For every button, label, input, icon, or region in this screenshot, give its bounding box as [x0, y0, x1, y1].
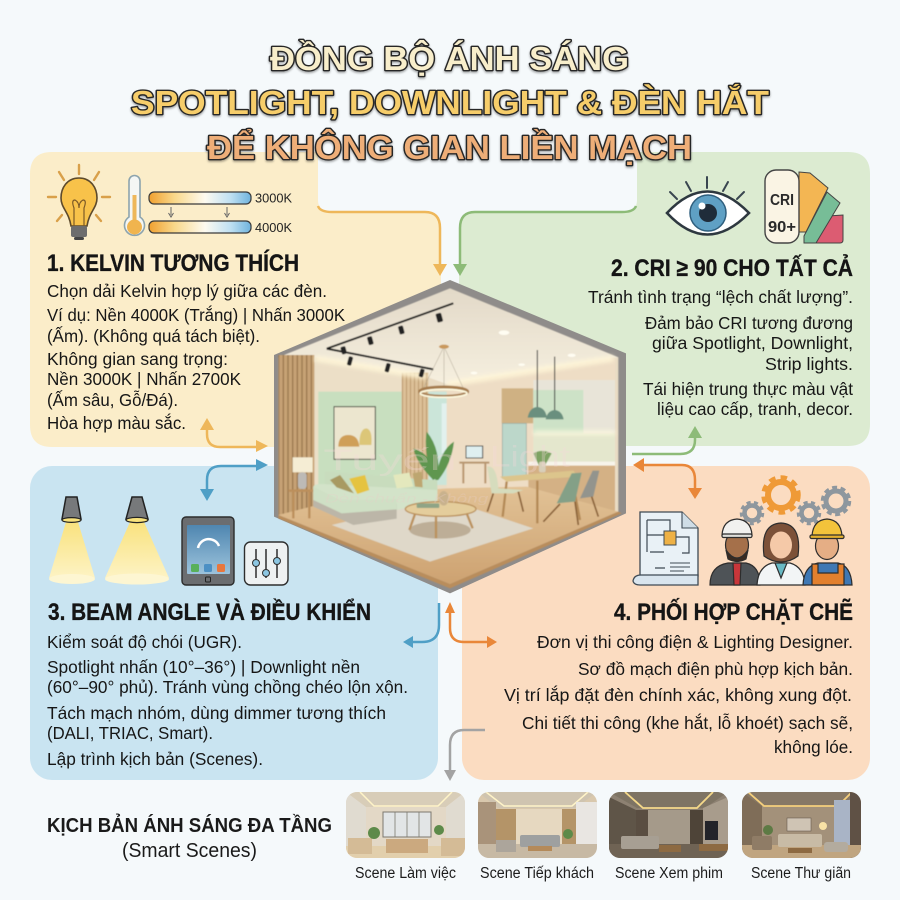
- text block: panel 4 body: Vị trí lắp đặt đèn chính xác, không xung đột.: [504, 685, 852, 705]
- text block: panel 2 body: [588, 287, 853, 419]
- arrow: yellow top: [318, 206, 447, 276]
- arrow: blue double: [200, 459, 268, 501]
- icon: spotlight narrow beam: [49, 497, 95, 584]
- text block: panel 3 body: Kiểm soát độ chói (UGR).: [47, 632, 242, 652]
- text block: panel 2 body: Tránh tình trạng “lệch chất lượng”.: [588, 287, 853, 307]
- icon: light bulb: [48, 165, 110, 240]
- text block: panel 1 body: Không gian sang trọng:: [47, 349, 228, 369]
- text block: panel 1 body: Hòa hợp màu sắc.: [47, 413, 186, 433]
- icon: CRI swatch fan: 90+: [768, 219, 796, 236]
- text block: panel 2 body: Strip lights.: [765, 354, 853, 374]
- text block: panel 3 body: (DALI, TRIAC, Smart).: [47, 723, 213, 743]
- text block: panel 2 body: Đảm bảo CRI tương đương: [645, 313, 853, 333]
- text block: panel 4 body: Chi tiết thi công (khe hắt, lỗ khoét) sạch sẽ,: [522, 713, 853, 733]
- scene: cinema: [609, 792, 728, 858]
- icon: thermometer: [124, 176, 144, 235]
- text block: panel 3 body: [47, 632, 408, 769]
- icon: eye: [667, 177, 749, 234]
- text block: panel 1 body: Nền 3000K | Nhấn 2700K: [47, 369, 241, 389]
- panel: 4 coordination: [462, 466, 870, 780]
- text block: panel 4 body: Đơn vị thi công điện & Lighting Designer.: [537, 632, 853, 652]
- heading: smart scenes: KỊCH BẢN ÁNH SÁNG ĐA TẦNG: [47, 814, 332, 837]
- text block: panel 2 body: giữa Spotlight, Downlight,: [652, 333, 853, 353]
- text block: panel 1 body: Chọn dải Kelvin hợp lý giữa các đèn.: [47, 281, 327, 301]
- central room illustration: Tuyến: [323, 444, 457, 477]
- heading: smart scenes: (Smart Scenes): [122, 839, 257, 862]
- scene: relax: [742, 792, 861, 858]
- heading: 4: 4. PHỐI HỢP CHẶT CHẼ: [614, 598, 853, 626]
- icon: sliders: [244, 542, 288, 585]
- scene: work: [346, 792, 465, 858]
- panel: 2 CRI: [459, 152, 870, 446]
- text block: panel 4 body: không lóe.: [774, 737, 853, 757]
- text block: panel 1 body: (Ấm). (Không quá tách biệt).: [47, 326, 260, 346]
- icon: CRI swatch fan: [765, 170, 843, 243]
- text block: panel 1 body: [47, 281, 345, 433]
- icon: downlight wide beam: [105, 497, 169, 584]
- central room illustration: Đèn chuẩn - Không: [325, 492, 489, 506]
- scene: reception: [478, 792, 597, 858]
- text block: panel 4 body: [504, 632, 853, 757]
- text block: panel 2 body: Tái hiện trung thực màu vật: [643, 379, 853, 399]
- arrow: green top: [453, 206, 636, 276]
- arrow: green small: [632, 426, 702, 454]
- heading: smart scenes: [47, 814, 332, 862]
- arrow: orange double upper: [633, 458, 702, 499]
- heading: 1: 1. KELVIN TƯƠNG THÍCH: [47, 249, 299, 277]
- text block: panel 3 body: (60°–90° phủ). Tránh vùng chồng chéo lộn xộn.: [47, 677, 408, 697]
- title: ĐỂ KHÔNG GIAN LIỀN MẠCH: [207, 128, 692, 166]
- text block: panel 3 body: Spotlight nhấn (10°–36°) | Downlight nền: [47, 657, 360, 677]
- panel: 3 beam angle: [30, 466, 438, 780]
- heading: 3: 3. BEAM ANGLE VÀ ĐIỀU KHIỂN: [48, 598, 371, 626]
- text block: panel 4 body: Sơ đồ mạch điện phù hợp kịch bản.: [578, 659, 853, 679]
- arrow: blue lower: [403, 603, 439, 648]
- icon: CRI swatch fan: CRI: [770, 192, 794, 209]
- title: ĐỒNG BỘ ÁNH SÁNG: [270, 39, 629, 77]
- icon: gears: [742, 478, 850, 524]
- scene labels: [355, 865, 851, 882]
- central room illustration: [274, 280, 626, 593]
- icon: colour temperature bars: 3000K: [255, 192, 293, 206]
- arrow: grey to scenes: [444, 730, 485, 781]
- heading: 2: 2. CRI ≥ 90 CHO TẤT CẢ: [611, 253, 853, 282]
- title: SPOTLIGHT, DOWNLIGHT & ĐÈN HẮT: [131, 84, 769, 121]
- arrow: yellow double: [200, 418, 268, 452]
- text block: panel 1 body: (Ấm sâu, Gỗ/Đá).: [47, 390, 178, 410]
- scene labels: Scene Thư giãn: [751, 865, 851, 882]
- icon: team of three workers: [710, 519, 852, 585]
- text block: panel 2 body: liệu cao cấp, tranh, decor.: [657, 399, 853, 419]
- scene labels: Scene Tiếp khách: [480, 865, 594, 882]
- icon: colour temperature bars: [149, 192, 293, 235]
- text block: panel 3 body: Lập trình kịch bản (Scenes).: [47, 749, 263, 769]
- central room illustration: Light: [490, 441, 571, 474]
- text block: panel 1 body: Ví dụ: Nền 4000K (Trắng) | Nhấn 3000K: [47, 305, 345, 325]
- scene labels: Scene Xem phim: [615, 865, 723, 882]
- text block: panel 3 body: Tách mạch nhóm, dùng dimmer tương thích: [47, 703, 386, 723]
- icon: tablet controller: [182, 517, 234, 585]
- panel: 1 Kelvin: [30, 152, 441, 447]
- icon: circuit plan document: [633, 512, 698, 585]
- title: [131, 39, 769, 166]
- arrow: orange double lower: [445, 602, 497, 648]
- icon: colour temperature bars: 4000K: [255, 221, 293, 235]
- scene labels: Scene Làm việc: [355, 865, 456, 882]
